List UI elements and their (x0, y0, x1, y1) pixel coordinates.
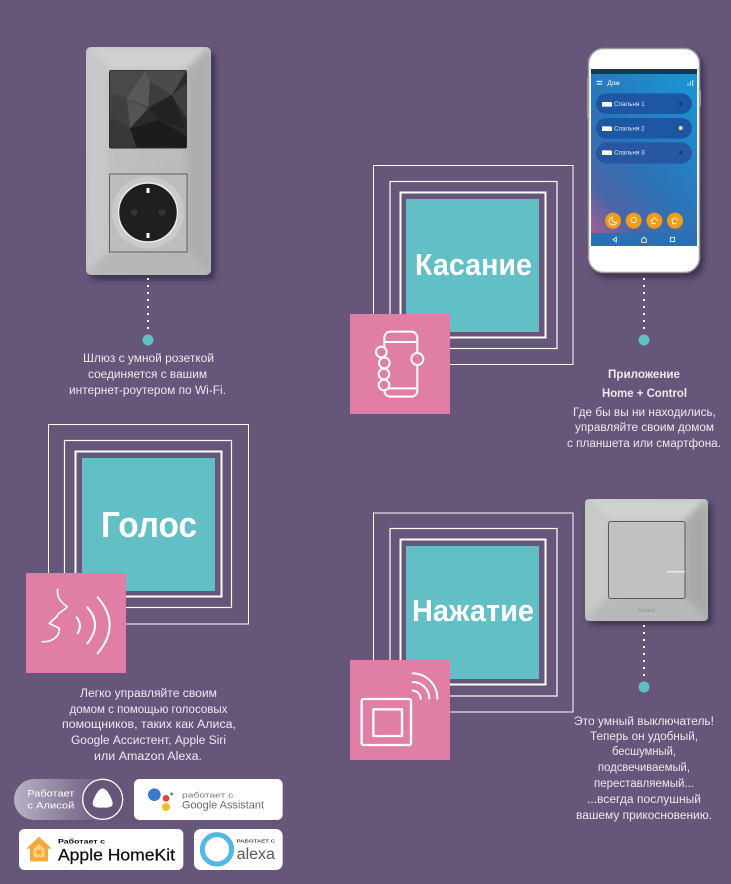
device: smartphone app: Спальня 1 (614, 101, 645, 108)
panel: press (374, 513, 573, 712)
badge: Apple HomeKit: Apple HomeKit (58, 845, 175, 864)
text: app description: Где бы вы ни находились, (573, 407, 716, 419)
icon: wireless switch (350, 660, 450, 760)
text: app description: управляйте своим домом (575, 422, 714, 434)
text: switch description (574, 716, 714, 822)
text: switch description: Это умный выключатель! (574, 716, 714, 728)
badge: Apple HomeKit (19, 829, 183, 870)
badge: works with Alice: Работает (27, 789, 75, 799)
text: switch description: ...всегда послушный (587, 794, 701, 806)
connector: phone dots (638, 278, 650, 346)
device: smartphone app: Спальня 2 (614, 126, 645, 133)
text: voice description: Легко управляйте своим (80, 688, 217, 700)
text: voice description: помощников, таких как Алиса, (62, 719, 236, 731)
text: voice description: Google Ассистент, Apple Siri (71, 735, 226, 747)
badge: Alexa: РАБОТАЕТ С (237, 838, 275, 844)
panel: touch (374, 166, 573, 364)
heading: press: Нажатие (412, 593, 534, 628)
badge: Alexa: alexa (237, 846, 275, 863)
device: gateway with smart socket (86, 47, 215, 280)
device: smartphone app: Спальня 3 (614, 150, 645, 157)
heading: voice: Голос (101, 504, 197, 545)
text: app description: Приложение (608, 369, 680, 381)
text: voice description: домом с помощью голосовых (70, 704, 228, 716)
text: gateway (69, 353, 226, 397)
badge: Google Assistant (134, 779, 283, 820)
badge: Alexa (194, 829, 283, 870)
icon: speaking face (26, 573, 126, 673)
heading: touch: Касание (415, 247, 532, 282)
device: smartphone app (587, 48, 704, 278)
text: voice description: или Amazon Alexa. (94, 751, 202, 763)
device: smartphone app: Дом (607, 80, 620, 87)
text: app description (567, 369, 721, 450)
badge: Google Assistant: работает с (182, 791, 234, 800)
icon: hand holding phone (350, 314, 450, 414)
panel: voice (48, 424, 248, 624)
badge: works with Alice (14, 779, 123, 820)
connector: gateway dots (142, 278, 154, 346)
device: smart switch: legrand (638, 608, 655, 614)
text: gateway: соединяется с вашим (88, 369, 207, 381)
badge: Apple HomeKit: Работает с (58, 837, 105, 845)
device: smart switch (585, 499, 712, 625)
text: gateway: Шлюз с умной розеткой (83, 353, 214, 365)
text: switch description: подсвечиваемый, (598, 762, 690, 774)
text: gateway: интернет-роутером по Wi-Fi. (69, 385, 226, 397)
connector: switch dots (638, 625, 650, 692)
text: switch description: вашему прикосновению. (576, 810, 712, 822)
text: app description: Home + Control (602, 388, 687, 400)
text: switch description: Теперь он удобный, (590, 731, 698, 743)
text: app description: с планшета или смартфона. (567, 438, 721, 450)
text: switch description: переставляемый... (594, 778, 694, 790)
badge: Google Assistant: Google Assistant (182, 800, 264, 812)
badge: works with Alice: с Алисой (27, 801, 74, 811)
text: switch description: бесшумный, (612, 746, 676, 758)
text: voice description (62, 688, 236, 763)
